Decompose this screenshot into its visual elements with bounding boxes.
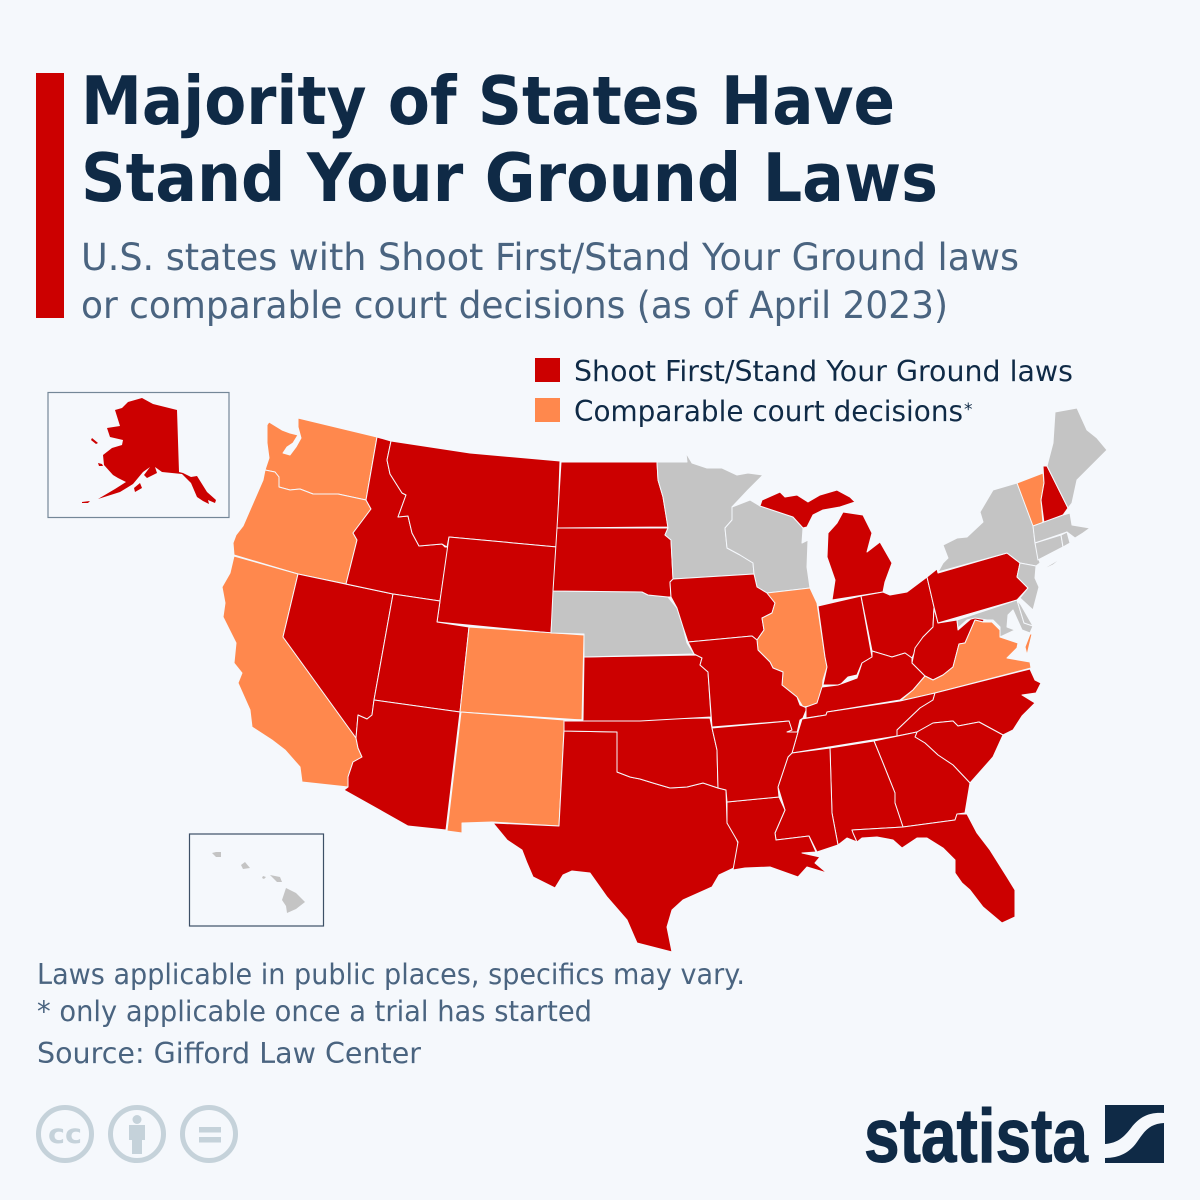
state: New York: [938, 483, 1040, 572]
state: Virginia: [900, 620, 1031, 701]
state: Montana: [387, 441, 560, 547]
state: Texas: [493, 731, 738, 952]
state: Virginia Eastern Shore: [1025, 634, 1032, 655]
state: California: [222, 556, 362, 787]
title: [81, 62, 938, 217]
state: South Carolina: [915, 721, 1003, 783]
icon: attribution: [110, 1108, 164, 1160]
legend: Shoot First/Stand Your Ground laws: [574, 355, 1073, 388]
state: New Jersey: [1017, 563, 1039, 610]
state: Missouri: [688, 636, 807, 733]
state: South Dakota: [553, 528, 673, 597]
state: Alaska: [82, 398, 216, 504]
footnotes: Laws applicable in public places, specifics may vary.: [37, 958, 745, 991]
statista wordmark: statista: [864, 1094, 1089, 1179]
state: Maine: [1047, 408, 1107, 508]
state: New Hampshire: [1041, 466, 1068, 523]
state: New Mexico: [447, 712, 564, 833]
subtitle: U.S. states with Shoot First/Stand Your Ground laws: [81, 236, 1019, 279]
footnotes: * only applicable once a trial has started: [37, 995, 592, 1028]
state: Oklahoma: [564, 718, 718, 788]
state: Pennsylvania: [927, 553, 1028, 623]
state: Michigan Lower Peninsula: [827, 512, 892, 600]
state: Arizona: [344, 700, 460, 830]
state: Nebraska: [551, 591, 694, 657]
state: Utah: [374, 594, 469, 712]
legend: *: [964, 400, 972, 420]
state: Arkansas: [712, 721, 798, 802]
title: Majority of States Have: [81, 62, 895, 140]
state: Connecticut: [1035, 535, 1063, 560]
accent bar: [36, 73, 64, 318]
state: Alabama: [830, 741, 903, 845]
state: Wyoming: [437, 537, 557, 633]
state: Idaho: [346, 437, 448, 601]
state: Vermont: [1017, 473, 1044, 526]
state: North Dakota: [557, 462, 668, 528]
state: West Virginia: [912, 608, 985, 680]
icon: creative commons: [38, 1108, 92, 1160]
icon: no derivatives: [182, 1108, 236, 1160]
state: Massachusetts: [1033, 513, 1090, 543]
legend: [535, 355, 1073, 428]
title: Stand Your Ground Laws: [81, 139, 938, 217]
icon: creative commons: cc: [48, 1119, 82, 1150]
footnotes: [37, 958, 745, 1028]
state: Delaware: [1017, 600, 1033, 626]
state: Ohio: [861, 577, 934, 658]
inset frame: Alaska: [48, 392, 229, 518]
state: Oregon: [233, 470, 371, 584]
state: Minnesota: [657, 453, 763, 579]
state: Nevada: [283, 574, 393, 738]
state: North Carolina: [897, 669, 1041, 736]
icon: statista logo: [1105, 1105, 1164, 1163]
state: Mississippi: [775, 748, 838, 852]
source: Source: Gifford Law Center: [37, 1037, 421, 1070]
state: Wisconsin: [725, 500, 810, 593]
subtitle: [81, 236, 1019, 327]
state: Michigan Upper Peninsula: [760, 490, 855, 528]
state: Illinois: [757, 588, 827, 707]
state: Tennessee: [792, 693, 935, 753]
state: Long Island: [1038, 557, 1063, 572]
state: Louisiana: [727, 797, 827, 877]
subtitle: or comparable court decisions (as of April 2023): [81, 284, 948, 327]
state: Florida: [852, 814, 1015, 923]
state: Maryland: [957, 600, 1033, 637]
state: Hawaii: [212, 852, 305, 913]
map: contiguous United States: [222, 408, 1107, 952]
state: Rhode Island: [1061, 532, 1070, 547]
inset frame: Hawaii: [190, 834, 324, 926]
state: Iowa: [670, 574, 775, 642]
state: Indiana: [818, 596, 872, 685]
state: Colorado: [460, 627, 584, 720]
state: Washington: [265, 418, 377, 500]
state: Kansas: [565, 655, 711, 721]
legend: Comparable court decisions: [574, 395, 963, 428]
state: Georgia: [874, 732, 970, 827]
state: Kentucky: [806, 651, 925, 718]
